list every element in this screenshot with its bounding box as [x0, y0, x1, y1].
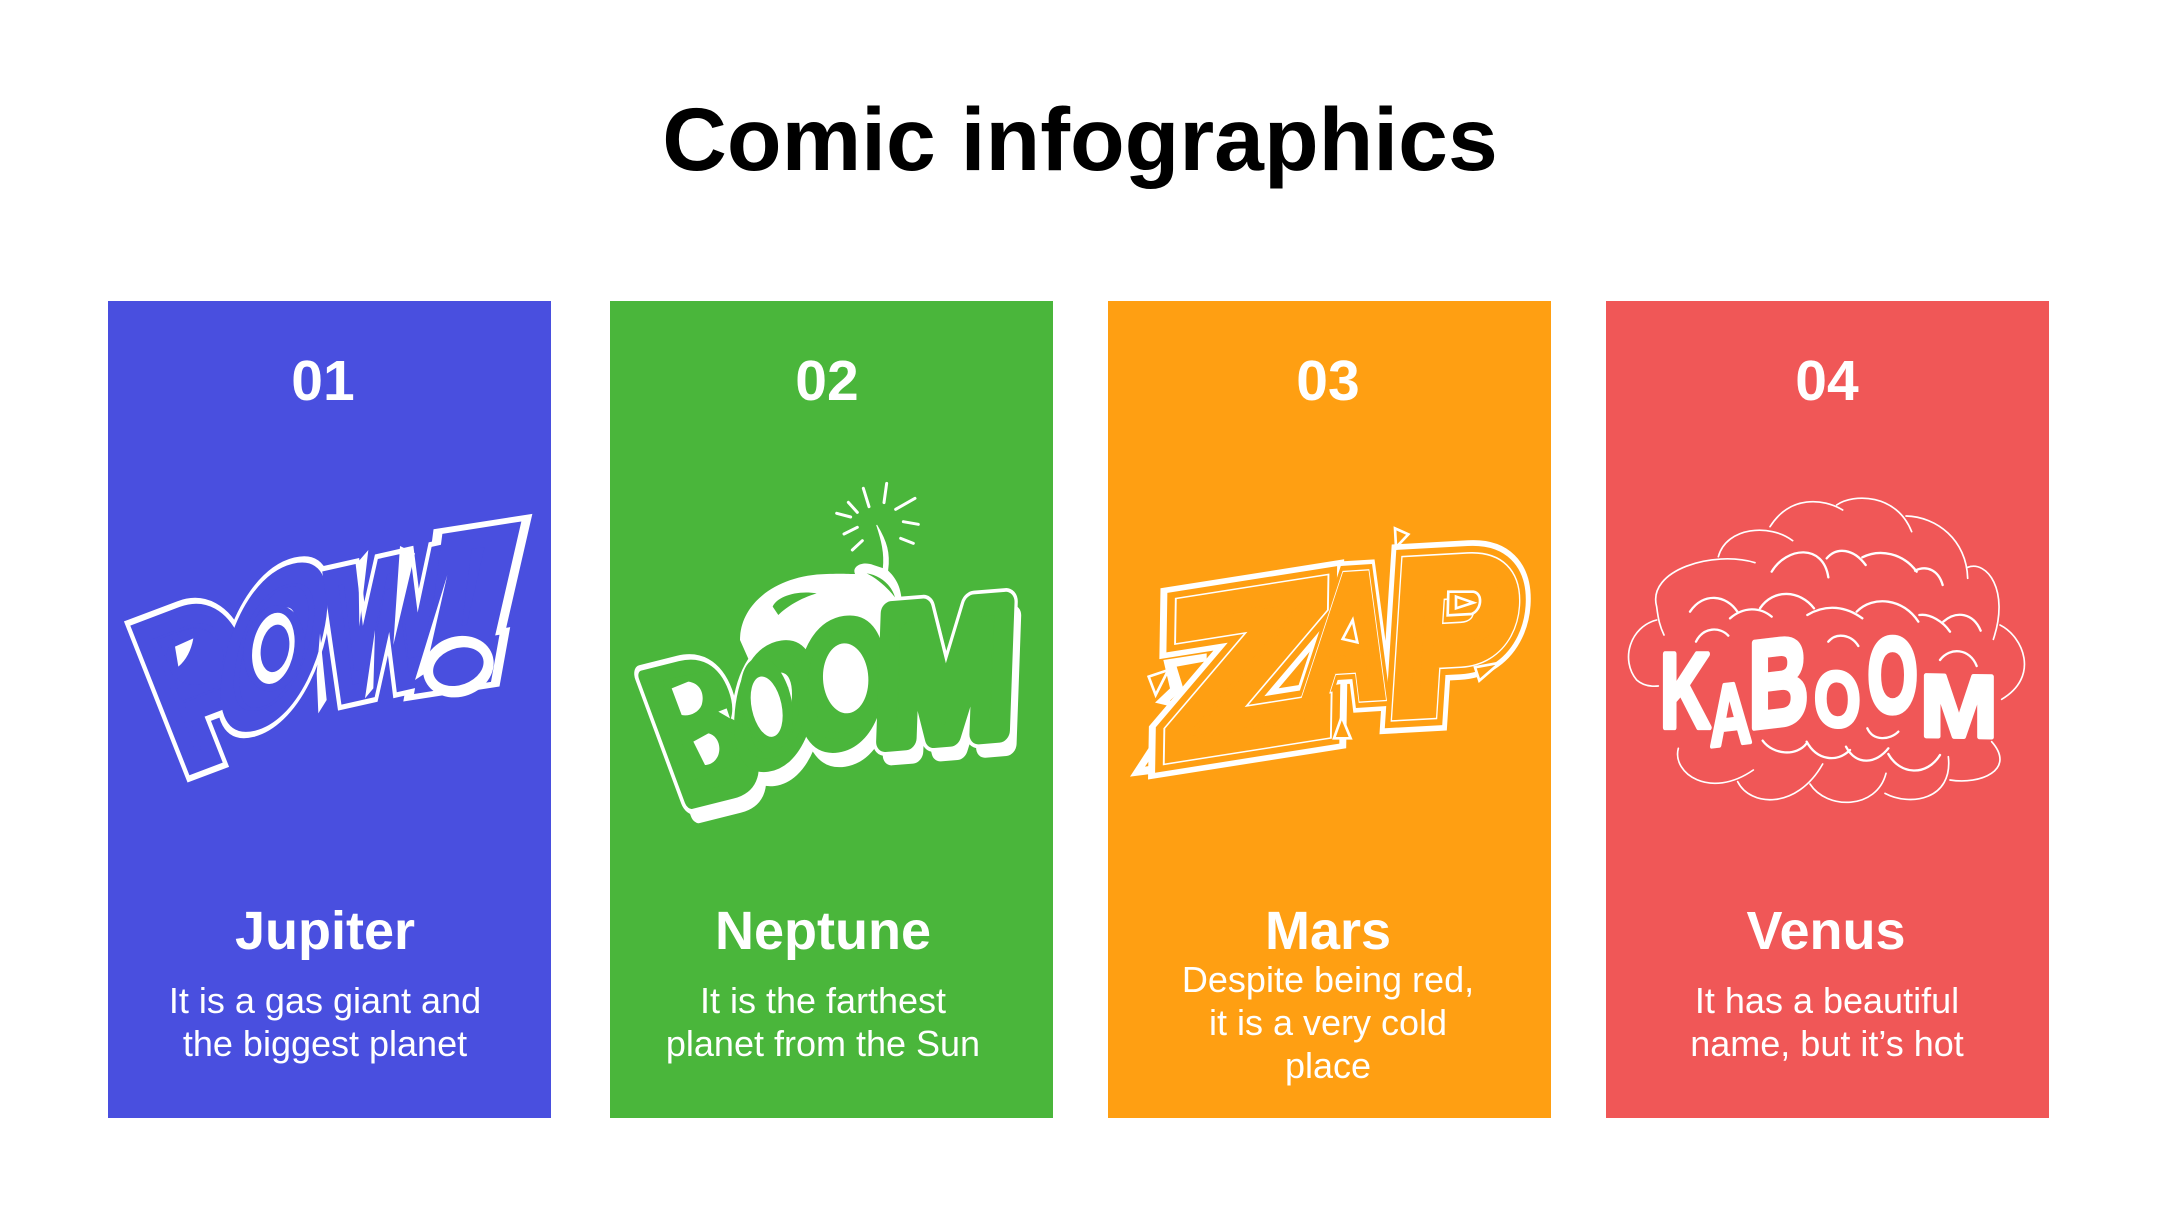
number 01: 01 [291, 349, 355, 413]
panel: Jupiter [108, 301, 551, 1118]
icon: BOOM bomb: O [800, 595, 896, 801]
icon: BOOM bomb: B [628, 634, 789, 856]
icon: BOOM bomb: M [874, 563, 1017, 782]
icon: ZAP lettering: A [1301, 541, 1397, 732]
icon: ZAP lettering: A [1301, 541, 1397, 732]
description [1690, 980, 1964, 1064]
icon: BOOM bomb: B [622, 620, 783, 843]
name: Mars [1265, 901, 1391, 961]
icon: BOOM bomb: O [732, 621, 831, 818]
icon: ZAP lettering: Z [1169, 542, 1328, 797]
description: It is the farthest [700, 980, 946, 1021]
icon: ZAP lettering [1130, 517, 1531, 797]
panel: Neptune [610, 301, 1053, 1118]
icon: POW! comic burst [115, 485, 541, 807]
description [169, 980, 481, 1064]
icon: ZAP lettering: P [1387, 517, 1522, 755]
number 03: 03 [1296, 349, 1360, 413]
icon: BOOM bomb: O [725, 608, 824, 805]
name: Jupiter [235, 901, 415, 961]
icon: ZAP lettering: P [1387, 517, 1522, 755]
icon: ZAP lettering: Z [1169, 542, 1328, 797]
icon: ZAP lettering: A [1301, 541, 1397, 732]
icon: KABOOM cloud: K [1660, 632, 1711, 751]
icon: POW! comic burst: W [321, 512, 459, 738]
name: Venus [1746, 901, 1906, 961]
panel: Venus [1606, 301, 2049, 1118]
description [666, 980, 980, 1064]
title: Comic infographics [662, 89, 1498, 189]
icon: KABOOM cloud [1628, 497, 2026, 804]
description: It is a gas giant and [169, 980, 481, 1021]
icon: POW! comic burst: P [115, 560, 291, 807]
icon: BOOM bomb: O [725, 608, 824, 805]
icon: POW! comic burst: O [200, 521, 348, 775]
icon: BOOM bomb: M [874, 563, 1017, 782]
icon: BOOM bomb: B [622, 620, 783, 843]
icon: ZAP lettering: P [1387, 517, 1522, 755]
description [1182, 959, 1474, 1086]
name: Neptune [715, 901, 931, 961]
icon: ZAP lettering: Z [1169, 542, 1328, 797]
icon: BOOM bomb: O [794, 582, 889, 788]
icon: POW! comic burst: ! [394, 485, 541, 729]
description: place [1285, 1045, 1371, 1086]
icon: BOOM bomb [622, 482, 1024, 856]
icon: KABOOM cloud: O [1867, 615, 1918, 735]
icon: POW! comic burst: ! [394, 485, 541, 729]
icon: BOOM bomb: M [880, 576, 1024, 795]
panel: Mars [1108, 301, 1551, 1118]
number 02: 02 [795, 349, 859, 413]
description: Despite being red, [1182, 959, 1474, 1000]
icon: KABOOM cloud: M [1920, 657, 1998, 757]
icon: KABOOM cloud: O [1814, 654, 1861, 744]
description: the biggest planet [183, 1023, 467, 1064]
description: It has a beautiful [1695, 980, 1959, 1021]
description: planet from the Sun [666, 1023, 980, 1064]
description: name, but it’s hot [1690, 1023, 1964, 1064]
icon: ZAP lettering: P [1387, 517, 1522, 755]
icon: POW! comic burst: W [321, 512, 459, 738]
icon: ZAP lettering: A [1301, 541, 1397, 732]
icon: BOOM bomb: O [794, 582, 889, 788]
icon: POW! comic burst: O [200, 521, 348, 775]
icon: ZAP lettering: Z [1169, 542, 1328, 797]
icon: POW! comic burst: P [115, 560, 291, 807]
number 04: 04 [1795, 349, 1859, 413]
description: it is a very cold [1209, 1002, 1447, 1043]
icon: KABOOM cloud: B [1748, 611, 1809, 755]
icon: KABOOM cloud: A [1707, 663, 1753, 765]
